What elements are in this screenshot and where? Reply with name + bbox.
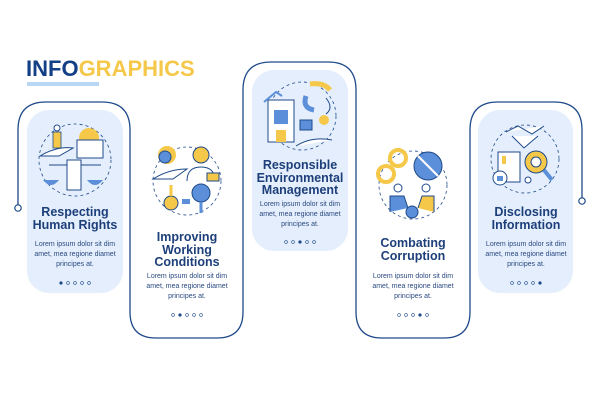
dots: panel 5 — [510, 281, 542, 285]
text: panel 2 body: Lorem ipsum dolor sit dim amet, mea regione diamet principes at. — [146, 273, 228, 300]
heading: Disclosing Information: Disclosing — [494, 205, 558, 219]
icon: human rights — [38, 124, 112, 196]
heading: Disclosing Information — [492, 205, 560, 232]
heading: Respecting Human Rights: Human Rights — [33, 218, 117, 232]
panel fill: panel 5 — [478, 110, 573, 293]
heading: Responsible Environmental Management — [257, 158, 343, 197]
panel fill: panel 3 — [252, 70, 348, 251]
dots: panel 2 — [171, 313, 203, 317]
heading: Combating Corruption — [380, 236, 446, 262]
title underline — [27, 82, 99, 86]
title: INFOGRAPHICS — [26, 56, 195, 81]
heading: Improving Working Conditions: Working — [162, 242, 212, 256]
heading: Respecting Human Rights — [33, 205, 117, 232]
heading: Improving Working Conditions: Conditions — [154, 255, 220, 269]
heading: Respecting Human Rights: Respecting — [41, 205, 109, 219]
heading: Combating Corruption: Combating — [380, 236, 446, 250]
icon: disclosing information — [490, 124, 560, 194]
panel fill: panel 1 — [27, 110, 123, 293]
text: panel 3 body: Lorem ipsum dolor sit dim amet, mea regione diamet principes at. — [259, 201, 341, 228]
heading: Responsible Environmental Management: Responsible — [263, 158, 337, 172]
text: panel 5 body: Lorem ipsum dolor sit dim amet, mea regione diamet principes at. — [485, 241, 567, 268]
icon: corruption — [376, 148, 448, 220]
heading: Responsible Environmental Management: Management — [262, 183, 338, 197]
heading: Combating Corruption: Corruption — [381, 248, 445, 262]
heading: Disclosing Information: Information — [492, 218, 560, 232]
heading: Responsible Environmental Management: Environmental — [257, 170, 343, 184]
icon: working conditions — [151, 146, 222, 216]
text: panel 1 body: Lorem ipsum dolor sit dim amet, mea regione diamet principes at. — [34, 241, 116, 268]
dots: panel 4 — [397, 313, 429, 317]
text: panel 4 body: Lorem ipsum dolor sit dim amet, mea regione diamet principes at. — [372, 273, 454, 300]
dots: panel 1 — [59, 281, 91, 285]
icon: environment — [263, 81, 336, 150]
heading: Improving Working Conditions — [154, 230, 220, 269]
heading: Improving Working Conditions: Improving — [157, 230, 217, 244]
dots: panel 3 — [284, 240, 316, 244]
